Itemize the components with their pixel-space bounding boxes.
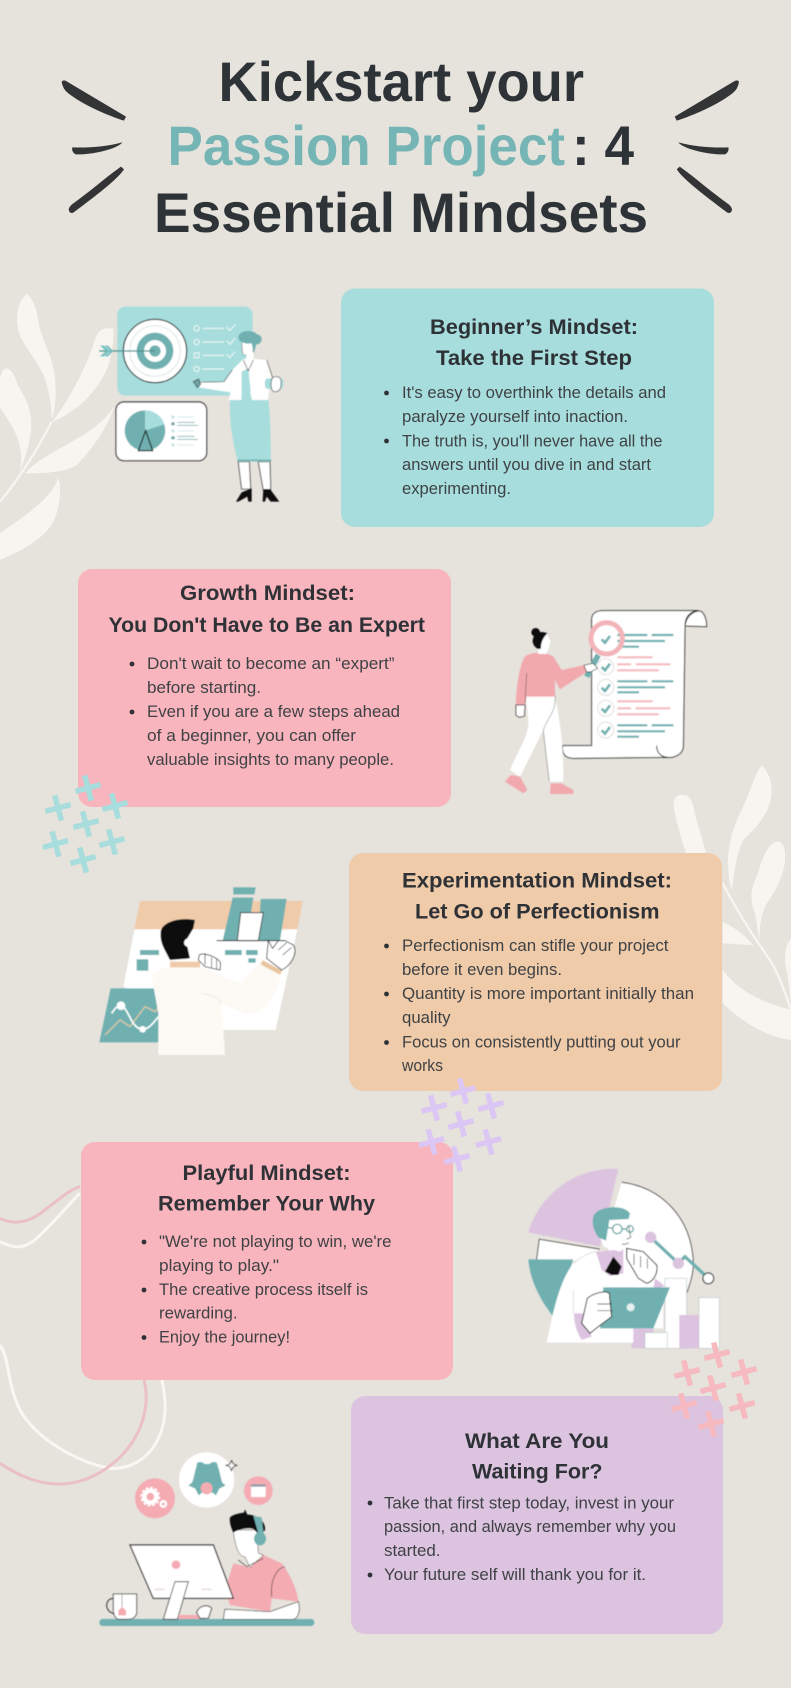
decorative plus marks: pink	[668, 1339, 760, 1440]
icon: calendar bubble	[244, 1476, 273, 1505]
icon: mug with tea bag	[107, 1594, 137, 1619]
bullet list: playful mindset: Enjoy the journey!	[159, 1328, 290, 1346]
illustration: man studying charts board	[99, 887, 303, 1055]
bullet list: growth mindset: before starting.	[147, 678, 261, 697]
heading: experimentation mindset: Let Go of Perfectionism	[415, 900, 660, 924]
panel: experimentation mindset	[349, 853, 722, 1091]
heading: what are you waiting for	[465, 1430, 609, 1484]
bullet list: experimentation mindset: quality	[402, 1008, 451, 1027]
icon: desk	[99, 1619, 314, 1626]
icon: checklist scroll	[562, 611, 707, 758]
heading: playful mindset	[158, 1162, 375, 1216]
heading: experimentation mindset	[402, 870, 672, 924]
icon: gears bubble	[135, 1478, 175, 1518]
bullet list: experimentation mindset: Focus on consistently putting out your	[402, 1032, 681, 1052]
bullet list: experimentation mindset: Quantity is more important initially than	[402, 984, 694, 1003]
icon: sparkle	[226, 1461, 237, 1471]
heading: beginner's mindset: Beginner’s Mindset:	[430, 316, 638, 339]
bullet list: call to action: passion, and always remember why you	[384, 1517, 676, 1536]
heading: growth mindset: You Don't Have to Be an Expert	[108, 614, 425, 637]
icon: chart board	[123, 887, 303, 1030]
bullet list: growth mindset	[130, 654, 400, 769]
heading: what are you waiting for: What Are You	[465, 1430, 609, 1453]
icon: frog bubble	[179, 1452, 234, 1508]
figure: man with headset	[223, 1509, 299, 1619]
icon: trend line	[645, 1232, 714, 1284]
icon: checklist	[194, 324, 235, 372]
panel: beginner's mindset	[341, 288, 714, 527]
icon: brush strokes left of title	[62, 80, 126, 213]
heading: what are you waiting for: Waiting For?	[472, 1460, 602, 1484]
icon: brush strokes right of title	[675, 80, 739, 213]
icon: line chart panel	[99, 988, 162, 1042]
bullet list: call to action: Take that first step today, invest in your	[384, 1494, 674, 1512]
panel: playful mindset	[81, 1142, 453, 1380]
icon: pie chart	[528, 1169, 693, 1317]
bullet list: playful mindset: The creative process itself is	[159, 1280, 368, 1299]
bullet list: playful mindset: playing to play."	[159, 1256, 279, 1275]
icon: bar chart	[632, 1278, 719, 1348]
title: Essential Mindsets	[154, 181, 648, 244]
bullet list: call to action	[368, 1494, 676, 1584]
bullet list: playful mindset: "We're not playing to win, we're	[159, 1232, 392, 1251]
panel: call to action	[351, 1396, 723, 1634]
illustration: man at computer with thought icons	[99, 1452, 314, 1626]
bullet list: beginner's mindset: experimenting.	[402, 479, 511, 498]
bullet list: beginner's mindset: It's easy to overthink the details and	[402, 383, 666, 402]
title: : 4	[572, 114, 634, 177]
bullet list: beginner's mindset: paralyze yourself into inaction.	[402, 407, 628, 426]
bullet list: experimentation mindset	[384, 936, 694, 1075]
panel: growth mindset	[78, 569, 451, 807]
heading: growth mindset: Growth Mindset:	[180, 582, 355, 605]
heading: beginner's mindset	[430, 316, 638, 370]
title	[154, 50, 648, 244]
decorative plus marks: teal	[40, 772, 131, 876]
heading: beginner's mindset: Take the First Step	[436, 347, 632, 370]
bullet list: growth mindset: valuable insights to many people.	[147, 750, 394, 769]
icon: pie chart card	[116, 402, 207, 461]
decorative plus marks: purple	[416, 1075, 507, 1175]
figure: woman with magnifier	[505, 628, 597, 794]
bullet list: experimentation mindset: before it even begins.	[402, 960, 562, 979]
heading: growth mindset	[108, 582, 425, 637]
bullet list: growth mindset: Don't wait to become an “expert”	[147, 654, 395, 673]
bullet list: experimentation mindset: Perfectionism can stifle your project	[402, 936, 669, 955]
illustration: woman presenting target and charts	[99, 307, 283, 502]
bullet list: growth mindset: of a beginner, you can offer	[147, 726, 356, 745]
figure: woman	[193, 331, 283, 502]
heading: experimentation mindset: Experimentation Mindset:	[402, 870, 672, 892]
bullet list: beginner's mindset: answers until you dive in and start	[402, 455, 651, 474]
illustration: woman reviewing checklist scroll	[505, 611, 707, 794]
heading: playful mindset: Playful Mindset:	[182, 1162, 350, 1185]
decorative curved lines: left side	[0, 1187, 165, 1484]
bullet list: call to action: started.	[384, 1541, 440, 1560]
decorative leaf: upper left	[0, 293, 114, 560]
decorative leaf: right side	[674, 765, 791, 1040]
illustration: man with laptop and pie chart	[528, 1169, 719, 1348]
figure: man thinking	[152, 919, 295, 1055]
figure: man with laptop	[547, 1207, 670, 1343]
bullet list: growth mindset: Even if you are a few steps ahead	[147, 702, 400, 721]
bullet list: beginner's mindset: The truth is, you'll never have all the	[402, 432, 662, 450]
bullet list: call to action: Your future self will thank you for it.	[384, 1565, 646, 1584]
bullet list: playful mindset: rewarding.	[159, 1304, 238, 1322]
bullet list: playful mindset	[142, 1232, 392, 1346]
bullet list: experimentation mindset: works	[401, 1056, 443, 1075]
icon: target with arrow	[99, 319, 187, 383]
title: Passion Project	[168, 114, 565, 177]
icon: computer monitor	[130, 1545, 233, 1619]
title: Kickstart your	[218, 50, 584, 113]
heading: playful mindset: Remember Your Why	[158, 1192, 375, 1216]
bullet list: beginner's mindset	[384, 383, 666, 498]
